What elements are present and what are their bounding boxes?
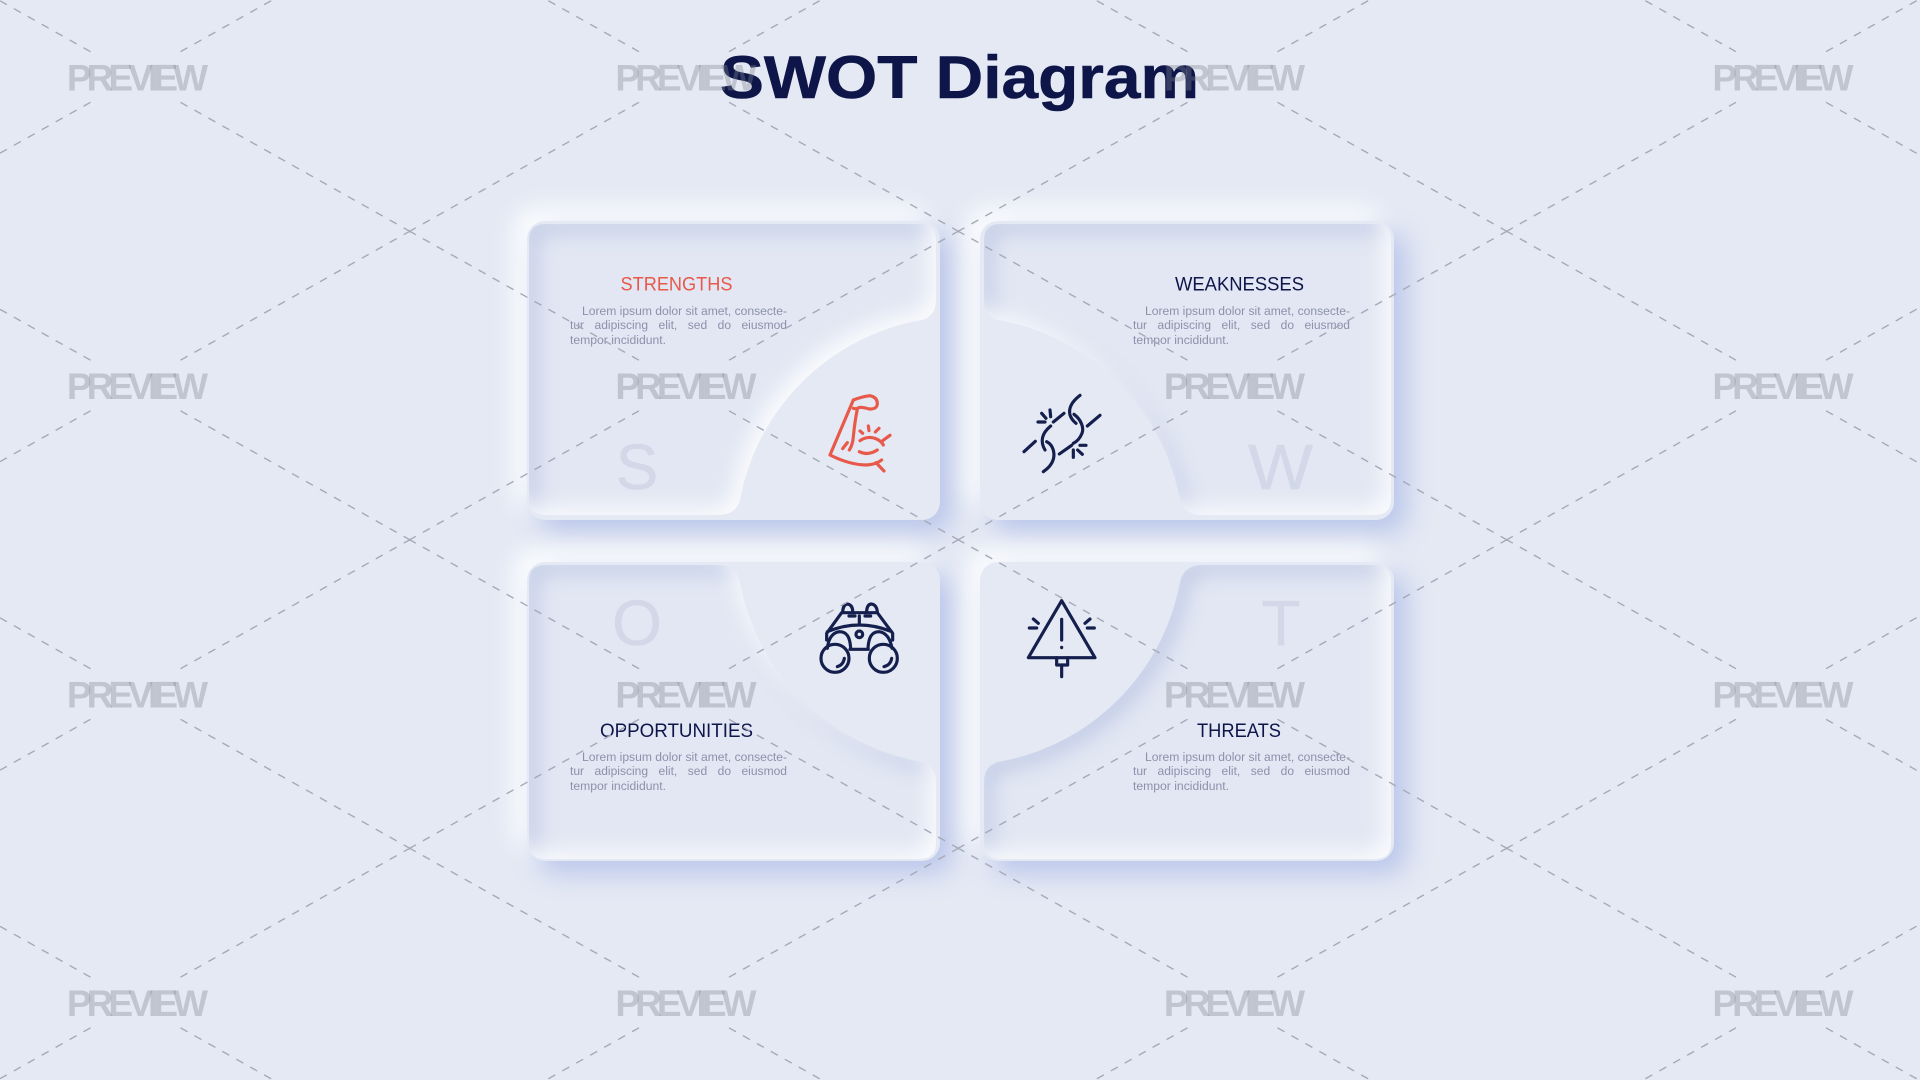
- icon: broken chain: [1024, 395, 1100, 472]
- card: opportunities base: [527, 562, 940, 861]
- recess: strengths: [529, 224, 936, 515]
- card: strengths base: [527, 221, 940, 520]
- panel: threats: [980, 562, 1394, 861]
- watermark overlay: PREVIEW: [67, 674, 208, 716]
- card: threats base: [980, 562, 1394, 861]
- letter O: O: [612, 587, 662, 659]
- text: weaknesses body: Lorem ipsum dolor sit amet, consecte-: [1145, 304, 1350, 318]
- text: weaknesses body: [1133, 304, 1350, 347]
- text: opportunities body: [570, 750, 787, 793]
- watermark overlay: PREVIEW: [1712, 366, 1854, 407]
- watermark overlay: PREVIEW: [1164, 674, 1305, 716]
- letter T: T: [1261, 587, 1301, 659]
- icon: binoculars: [821, 604, 897, 672]
- text: strengths body: tempor incididunt.: [570, 333, 666, 347]
- recess: weaknesses: [984, 224, 1391, 515]
- panel: strengths: [527, 221, 940, 520]
- text: weaknesses body: tempor incididunt.: [1133, 333, 1229, 347]
- title: SWOT Diagram: [720, 44, 1199, 111]
- icon: flexed arm: [830, 396, 890, 471]
- watermark overlay: PREVIEW: [67, 366, 208, 407]
- text: opportunities body: Lorem ipsum dolor sit amet, consecte-: [582, 750, 787, 764]
- text: strengths body: [570, 304, 787, 347]
- watermark overlay: PREVIEW: [615, 983, 757, 1024]
- watermark overlay: PREVIEW: [615, 366, 757, 407]
- letter S: S: [616, 431, 658, 503]
- icon: warning triangle: [1028, 601, 1095, 677]
- watermark overlay: PREVIEW: [1164, 983, 1305, 1024]
- heading: threats: THREATS: [1197, 721, 1281, 742]
- watermark overlay: PREVIEW: [1164, 366, 1305, 407]
- letter W: W: [1248, 431, 1314, 503]
- text: weaknesses body: tur adipiscing elit, sed do eiusmod: [1133, 318, 1350, 332]
- text: threats body: [1133, 750, 1350, 793]
- recess: opportunities: [529, 565, 936, 859]
- watermark overlay: PREVIEW: [1712, 674, 1854, 716]
- watermark overlay: PREVIEW: [1164, 58, 1305, 98]
- text: threats body: tempor incididunt.: [1133, 779, 1229, 793]
- recess: threats: [984, 565, 1391, 859]
- heading: opportunities: OPPORTUNITIES: [600, 721, 753, 742]
- text: opportunities body: tempor incididunt.: [570, 779, 666, 793]
- text: strengths body: tur adipiscing elit, sed do eiusmod: [570, 318, 787, 332]
- text: threats body: tur adipiscing elit, sed do eiusmod: [1133, 764, 1350, 778]
- panel: opportunities: [527, 562, 940, 861]
- watermark overlay: PREVIEW: [67, 58, 208, 98]
- heading: weaknesses: WEAKNESSES: [1175, 274, 1304, 296]
- heading: strengths: STRENGTHS: [620, 274, 732, 296]
- watermark overlay: PREVIEW: [1712, 983, 1854, 1024]
- text: strengths body: Lorem ipsum dolor sit amet, consecte-: [582, 304, 787, 318]
- card: weaknesses base: [980, 221, 1394, 520]
- watermark overlay: PREVIEW: [615, 58, 757, 98]
- watermark overlay: PREVIEW: [1712, 58, 1854, 98]
- text: opportunities body: tur adipiscing elit, sed do eiusmod: [570, 764, 787, 778]
- watermark overlay: PREVIEW: [615, 674, 757, 716]
- panel: weaknesses: [980, 221, 1394, 520]
- text: threats body: Lorem ipsum dolor sit amet, consecte-: [1145, 750, 1350, 764]
- watermark overlay: PREVIEW: [67, 983, 208, 1024]
